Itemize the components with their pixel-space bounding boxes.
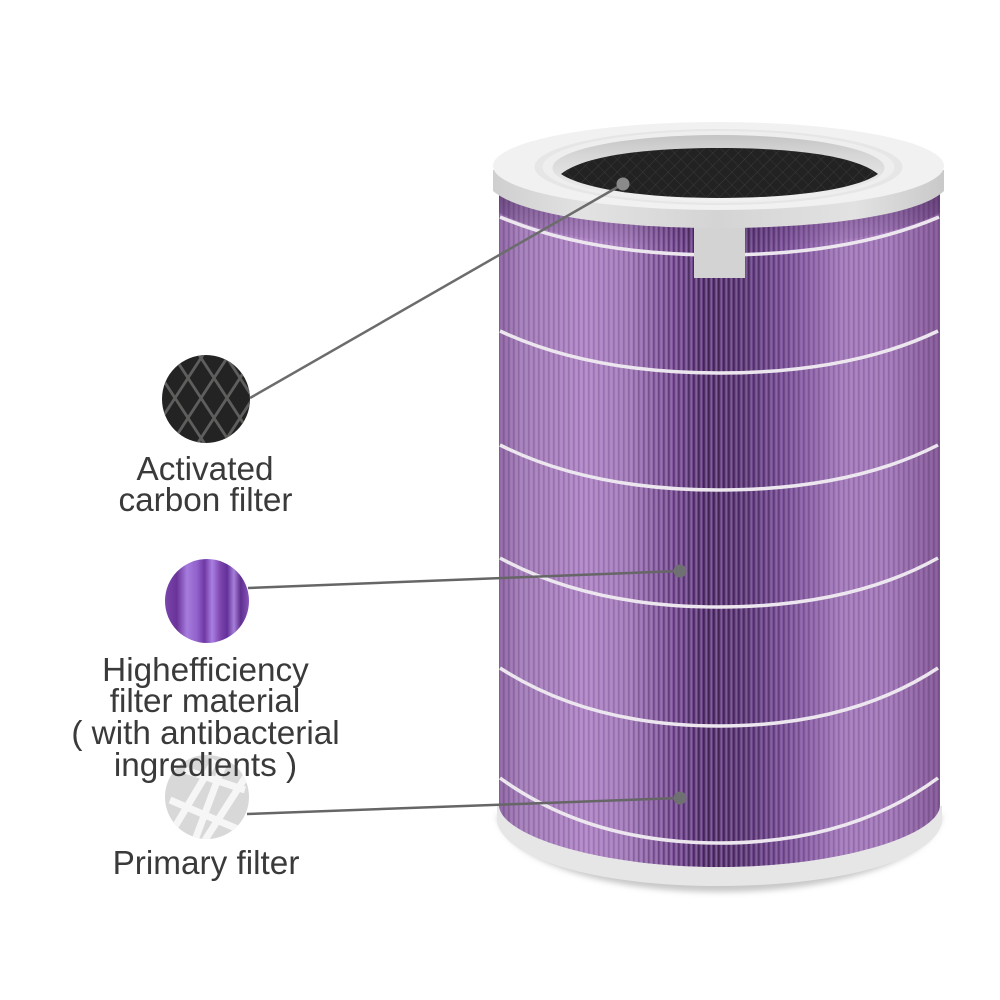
callout: high efficiency material [165,559,686,643]
label: high efficiency filter material: ( with antibacterial [71,715,340,752]
bottom white lip [497,806,942,892]
icon: primary filter swatch [165,755,250,840]
label: high efficiency filter material: Highefficiency [102,652,309,689]
filter cartridge [493,122,944,892]
leader line: primary [247,792,686,814]
label: activated carbon filter: Activated [137,451,273,488]
label: high efficiency filter material: ingredients ) [114,747,297,784]
label: high efficiency filter material: filter material [110,683,300,720]
callout: activated carbon [119,178,630,519]
purple pleated body [498,190,941,870]
callout: primary filter [113,755,686,882]
leader line: high efficiency [248,564,686,588]
label: activated carbon filter: carbon filter [119,482,292,519]
icon: carbon mesh swatch [162,355,250,443]
label: primary filter: Primary filter [113,845,299,882]
pull tab [694,226,745,278]
activated carbon mesh opening [561,148,878,198]
icon: purple pleat swatch [165,559,249,643]
top rim [493,122,944,228]
leader line: carbon [250,178,630,398]
white retaining bands [500,217,939,843]
